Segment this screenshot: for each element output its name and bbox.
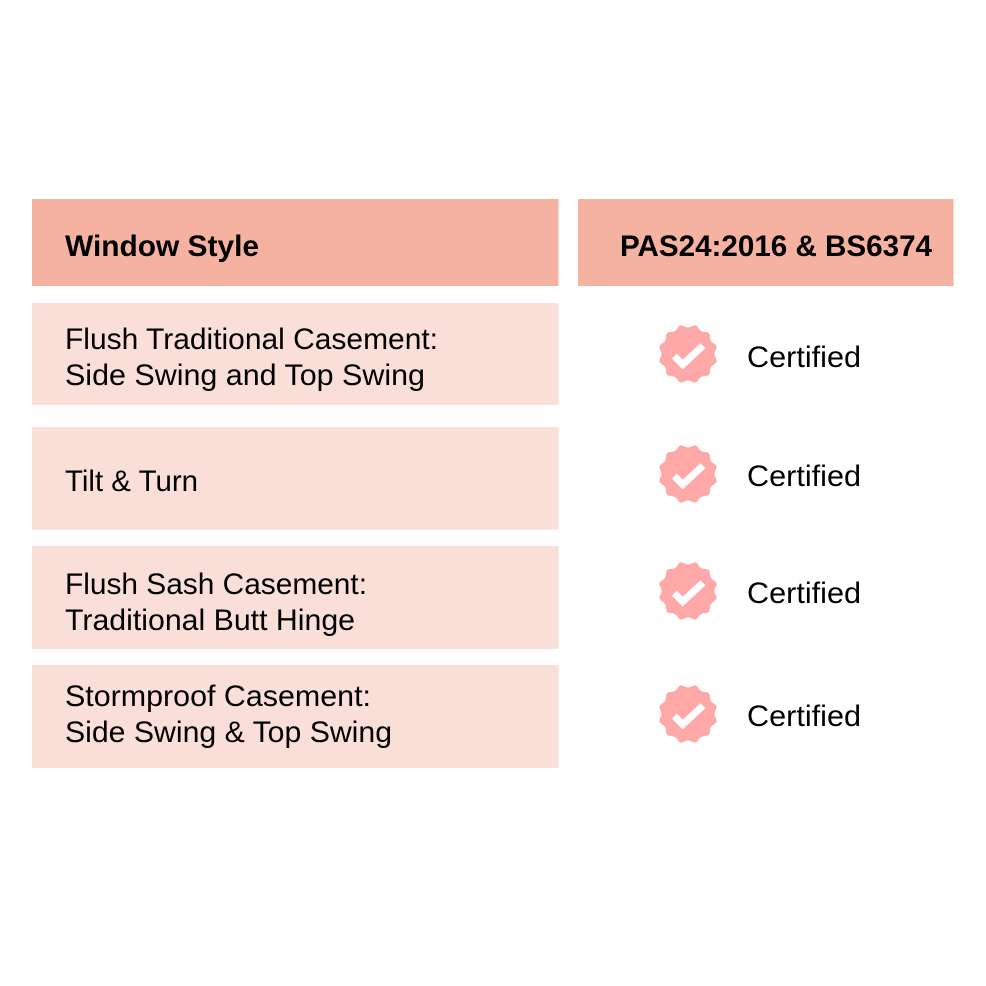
icon: certified badge row 2	[659, 445, 717, 503]
row 4: stormproof casement	[32, 665, 558, 768]
row 1: flush traditional casement: Side Swing and Top Swing	[65, 359, 425, 392]
label: certified row 3: Certified	[747, 577, 861, 610]
row 2: tilt and turn	[32, 427, 558, 530]
header: PAS24:2016 & BS6374: PAS24:2016 & BS6374	[620, 230, 933, 263]
icon: certified badge row 3	[659, 562, 717, 620]
label: certified row 2: Certified	[747, 460, 861, 493]
icon: certified badge row 4	[659, 685, 717, 743]
row 4: stormproof casement: Side Swing & Top Swing	[65, 716, 392, 749]
row 3: flush sash casement: Traditional Butt Hinge	[65, 604, 355, 637]
label: certified row 1: Certified	[747, 341, 861, 374]
header: window style	[32, 199, 558, 286]
row 1: flush traditional casement: Flush Traditional Casement:	[65, 323, 438, 356]
row 2: tilt and turn: Tilt & Turn	[65, 465, 198, 498]
row 1: flush traditional casement	[32, 303, 558, 405]
row 3: flush sash casement	[32, 546, 558, 649]
header: window style: Window Style	[65, 230, 259, 263]
header: PAS24:2016 & BS6374	[578, 199, 954, 286]
label: certified row 4: Certified	[747, 700, 861, 733]
icon: certified badge row 1	[659, 325, 717, 383]
row 4: stormproof casement: Stormproof Casement:	[65, 680, 371, 713]
row 3: flush sash casement: Flush Sash Casement:	[65, 568, 367, 601]
